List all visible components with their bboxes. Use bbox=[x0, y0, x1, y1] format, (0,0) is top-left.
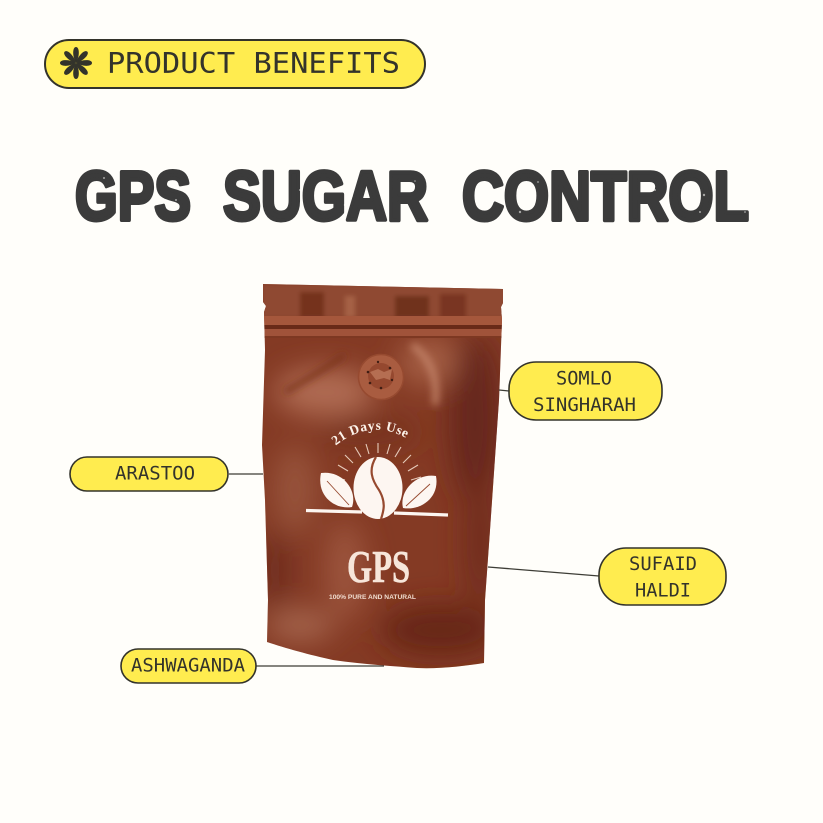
pouch logo bbox=[306, 422, 448, 601]
connector lines bbox=[229, 390, 599, 666]
label: ashwaganda bbox=[121, 649, 256, 683]
pouch tagline: 100% PURE AND NATURAL bbox=[329, 595, 416, 601]
title: SUGAR bbox=[223, 157, 428, 235]
label: sufaid haldi: HALDI bbox=[635, 580, 691, 602]
icon: flower asterisk bbox=[60, 47, 92, 79]
title bbox=[75, 157, 749, 235]
zipper seal bbox=[262, 316, 507, 338]
label: ashwaganda: ASHWAGANDA bbox=[131, 654, 246, 676]
product pouch bbox=[262, 284, 503, 668]
label: arastoo: ARASTOO bbox=[115, 462, 195, 484]
logo sun rays bbox=[335, 443, 421, 480]
label: somlo singharah: SOMLO bbox=[556, 368, 612, 390]
GPS wordmark: GPS bbox=[347, 541, 410, 592]
label: arastoo bbox=[70, 457, 228, 491]
logo leaves bbox=[320, 473, 437, 508]
label: somlo singharah: SINGHARAH bbox=[533, 394, 636, 416]
degassing valve bbox=[358, 354, 404, 400]
logo ground line bbox=[306, 510, 448, 515]
title: GPS bbox=[75, 157, 191, 235]
label: sufaid haldi bbox=[599, 548, 726, 605]
label: somlo singharah bbox=[509, 362, 662, 420]
logo coffee bean bbox=[354, 457, 402, 519]
title: CONTROL bbox=[462, 157, 749, 235]
badge label: PRODUCT BENEFITS bbox=[107, 47, 400, 80]
logo arc text: 21 Days Use bbox=[331, 422, 408, 446]
badge: product benefits bbox=[45, 40, 425, 88]
label: sufaid haldi: SUFAID bbox=[629, 553, 697, 575]
